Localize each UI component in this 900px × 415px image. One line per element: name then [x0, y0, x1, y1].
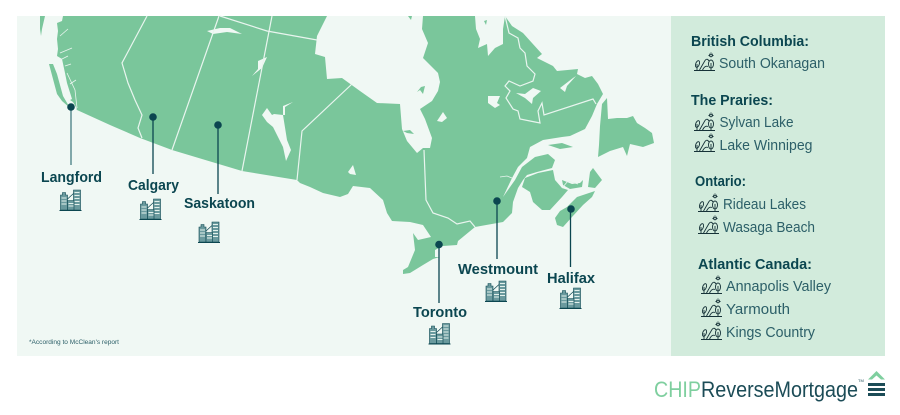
icon: buildings Saskatoon: [198, 222, 220, 242]
icon: lake: [694, 134, 715, 152]
logo: CHIP Reverse Mortgage: [654, 371, 885, 402]
Vancouver Island: [49, 64, 70, 108]
icon: house stack: [868, 371, 885, 396]
label: Toronto: Toronto: [413, 304, 467, 321]
icon: buildings Langford: [60, 190, 82, 210]
panel: regions list: [671, 16, 885, 356]
icon: buildings Calgary: [140, 199, 162, 220]
heading: British Columbia: British Columbia:: [691, 34, 809, 50]
Prince Edward Island: [562, 180, 583, 189]
place: South Okanagan: South Okanagan: [719, 56, 825, 72]
icon: lake: [698, 194, 719, 212]
pin: Calgary: [149, 113, 157, 174]
heading: Atlantic Canada: Atlantic Canada:: [698, 257, 812, 273]
footnote: *According to McClean's report: [29, 340, 119, 346]
place: Annapolis Valley: Annapolis Valley: [726, 279, 832, 295]
icon: lake: [701, 298, 722, 316]
trademark: TM: [858, 378, 864, 383]
place: Rideau Lakes: Rideau Lakes: [723, 197, 806, 213]
place: Yarmouth: Yarmouth: [726, 302, 790, 318]
wordmark: CHIP: CHIP: [654, 377, 701, 402]
New Brunswick: [522, 170, 568, 210]
heading: The Praries: The Praries:: [691, 93, 773, 109]
heading: Ontario: Ontario:: [695, 174, 746, 190]
Cape Breton: [588, 168, 602, 188]
lakes and channels: [70, 28, 582, 175]
label: Saskatoon: Saskatoon: [184, 195, 255, 212]
pin: Saskatoon: [214, 121, 222, 194]
Nova Scotia: [555, 191, 595, 227]
place: Kings Country: Kings Country: [726, 325, 816, 341]
place: Lake Winnipeg: Lake Winnipeg: [720, 138, 812, 154]
mainland: [57, 16, 603, 274]
Anticosti: [548, 143, 573, 149]
icon: buildings Halifax: [560, 288, 582, 308]
map of Canada: [40, 16, 654, 274]
pin: Halifax: [567, 205, 575, 267]
icon: buildings Toronto: [428, 324, 450, 344]
icon: lake: [694, 112, 715, 130]
wordmark: ReverseMortgage: ReverseMortgage: [701, 377, 858, 402]
label: Westmount: Westmount: [458, 261, 538, 278]
pin: Westmount: [493, 197, 501, 259]
fjords and rivers: [60, 29, 578, 188]
panel: map background: [17, 16, 671, 356]
Haida Gwaii: [40, 16, 45, 36]
label: Calgary: Calgary: [128, 177, 180, 194]
label: Halifax: Halifax: [547, 270, 596, 287]
Newfoundland: [598, 98, 654, 157]
provincial borders: [122, 16, 596, 227]
pin: Langford: [67, 103, 75, 165]
pin: Toronto: [435, 241, 443, 303]
icon: lake: [701, 276, 722, 294]
icon: lake: [701, 322, 722, 340]
small islands: [403, 16, 487, 134]
icon: lake: [698, 216, 719, 234]
place: Sylvan Lake: Sylvan Lake: [720, 115, 794, 131]
icon: buildings Westmount: [485, 281, 507, 302]
icon: lake: [694, 52, 715, 70]
place: Wasaga Beach: Wasaga Beach: [723, 220, 815, 236]
label: Langford: Langford: [41, 169, 102, 186]
